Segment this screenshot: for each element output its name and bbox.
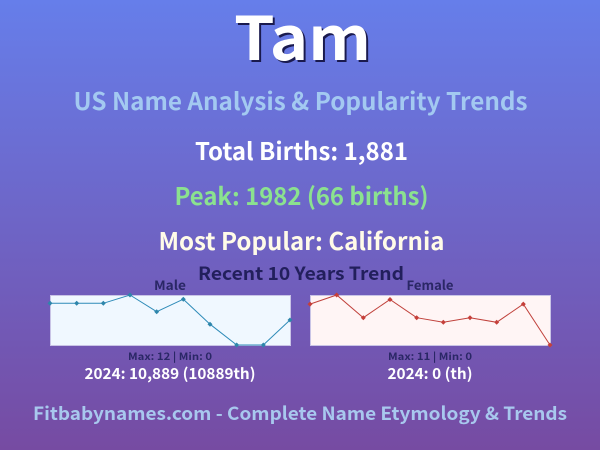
female 2024 stat: 2024: 0 (th)	[388, 363, 472, 384]
footer: Fitbabynames.com - Complete Name Etymology & Trends	[33, 400, 567, 426]
most popular state: Most Popular: California	[158, 222, 444, 257]
male markers	[48, 292, 292, 348]
female markers	[308, 292, 552, 348]
female line	[310, 295, 550, 345]
female plot background	[310, 296, 550, 346]
male label: Male	[154, 275, 186, 294]
female max min: Max: 11 | Min: 0	[388, 348, 472, 363]
panel: male chart	[48, 275, 292, 384]
total births: Total Births: 1,881	[195, 132, 408, 167]
male max min: Max: 12 | Min: 0	[128, 348, 212, 363]
subtitle: US Name Analysis & Popularity Trends	[74, 82, 528, 117]
male 2024 stat: 2024: 10,889 (10889th)	[84, 363, 256, 384]
panel: female chart	[308, 275, 552, 384]
female label: Female	[406, 275, 454, 294]
trend heading: Recent 10 Years Trend	[198, 260, 404, 286]
male line	[50, 295, 290, 345]
peak year: Peak: 1982 (66 births)	[174, 177, 428, 212]
male plot background	[50, 296, 290, 346]
